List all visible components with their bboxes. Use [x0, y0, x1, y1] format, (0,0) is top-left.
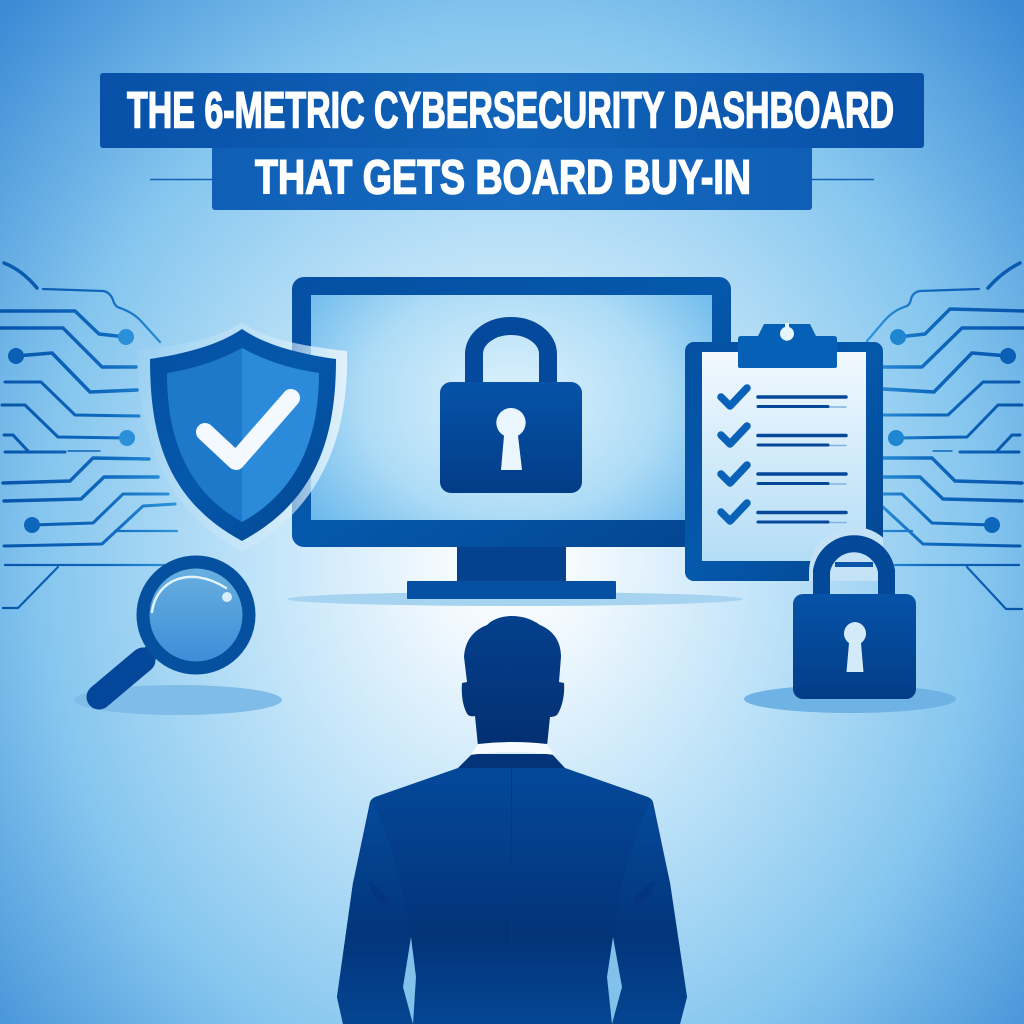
left circuit lines — [0, 263, 177, 608]
monitor — [287, 277, 743, 606]
clipboard clip — [738, 324, 837, 368]
lens highlight — [152, 577, 226, 612]
icon: screen padlock — [440, 326, 582, 493]
monitor stand — [457, 546, 566, 582]
right circuit lines — [867, 263, 1024, 609]
sleeve creases — [368, 881, 655, 907]
title — [100, 73, 924, 210]
person head — [462, 616, 564, 746]
monitor frame — [292, 277, 731, 547]
gaps between arms and torso — [403, 937, 622, 1024]
monitor floor shadow — [287, 592, 743, 606]
back seam — [510, 768, 512, 960]
magnifier shadow — [74, 685, 282, 715]
clipboard edge seen through shackle — [835, 562, 873, 567]
icon: magnifying glass — [74, 562, 282, 715]
icon: shield with checkmark — [137, 322, 347, 552]
person sleeves — [337, 800, 413, 1024]
person from behind — [337, 616, 687, 1024]
padlock halo over clipboard — [809, 528, 883, 581]
title connector lines — [150, 178, 874, 180]
clipboard sheet — [702, 352, 866, 561]
padlock keyhole — [844, 622, 866, 672]
padlock shadow — [744, 685, 956, 713]
clipboard — [685, 323, 883, 581]
jacket collar — [458, 754, 565, 768]
magnifier lens — [143, 562, 249, 668]
title text line 2: THAT GETS BOARD BUY-IN — [255, 150, 751, 204]
checklist rows — [721, 388, 846, 522]
padlock shackle — [822, 544, 886, 596]
icon: foreground padlock — [744, 527, 956, 713]
white shirt collar — [470, 742, 555, 755]
title banner line 1 — [100, 73, 924, 148]
monitor base — [407, 581, 616, 599]
clipboard board — [685, 342, 883, 581]
magnifier handle — [99, 660, 143, 697]
title banner line 2 — [212, 140, 812, 210]
checkmark — [205, 398, 291, 461]
monitor screen — [311, 295, 712, 520]
padlock body — [793, 594, 916, 699]
person torso — [337, 768, 687, 1024]
